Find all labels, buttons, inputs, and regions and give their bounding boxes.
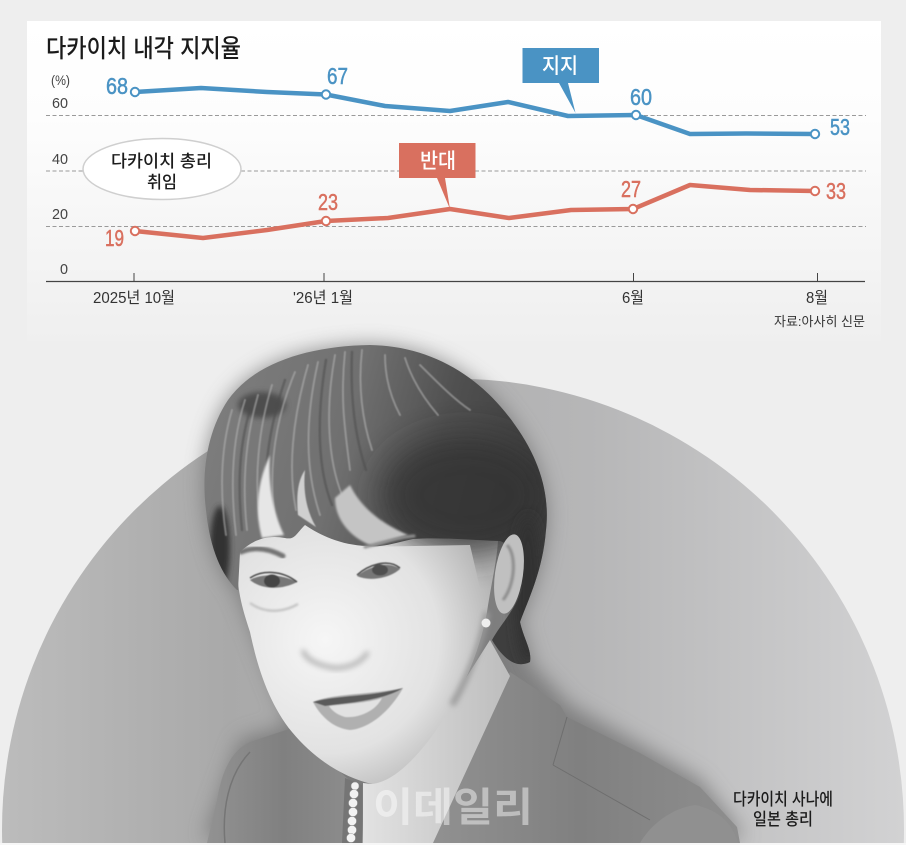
background circle [2, 379, 904, 843]
x axis labels: 6월 [622, 289, 644, 307]
disapproval values: 23 [318, 189, 338, 215]
label: disapproval: 반대 [420, 150, 456, 173]
y axis labels: 60 [52, 95, 68, 112]
y axis labels [51, 72, 70, 278]
approval values: 67 [327, 63, 348, 89]
x axis [46, 273, 865, 282]
approval values: 53 [830, 114, 850, 140]
disapproval values: 27 [621, 176, 641, 202]
watermark: 이데일리 [373, 786, 533, 830]
x axis labels [93, 289, 828, 307]
label: approval: 지지 [542, 55, 578, 78]
y axis labels: 40 [52, 151, 68, 168]
grid lines [46, 116, 866, 226]
source note: 자료:아사히 신문 [774, 314, 865, 329]
line: approval [131, 88, 819, 138]
approval values: 60 [630, 84, 652, 110]
portrait: Takaichi Sanae [204, 345, 745, 843]
x axis labels: '26년 1월 [293, 289, 353, 307]
disapproval values: 19 [105, 225, 124, 251]
x axis labels: 2025년 10월 [93, 289, 175, 307]
facial features [241, 536, 414, 730]
label: approval [522, 48, 599, 113]
y axis labels: (%) [51, 72, 70, 88]
approval values: 68 [106, 73, 128, 99]
callout: Takaichi takes office: 취임 [147, 173, 177, 192]
y axis labels: 20 [52, 206, 68, 223]
y axis labels: 0 [60, 261, 68, 278]
portrait caption [733, 790, 833, 829]
label: disapproval [399, 143, 476, 209]
disapproval values [105, 176, 846, 251]
x axis labels: 8월 [806, 289, 828, 307]
chart title: 다카이치 내각 지지율 [46, 35, 241, 63]
portrait caption: 일본 총리 [753, 810, 813, 829]
chart panel background [27, 21, 881, 341]
disapproval values: 33 [826, 178, 846, 204]
approval values [106, 63, 850, 140]
ear and earring [482, 534, 524, 628]
callout: Takaichi takes office: 다카이치 총리 [111, 152, 212, 171]
pearl necklace [346, 782, 359, 842]
page bottom edge [0, 843, 906, 845]
callout: Takaichi takes office [83, 138, 241, 200]
line: disapproval [131, 185, 819, 238]
portrait caption: 다카이치 사나에 [733, 790, 833, 809]
